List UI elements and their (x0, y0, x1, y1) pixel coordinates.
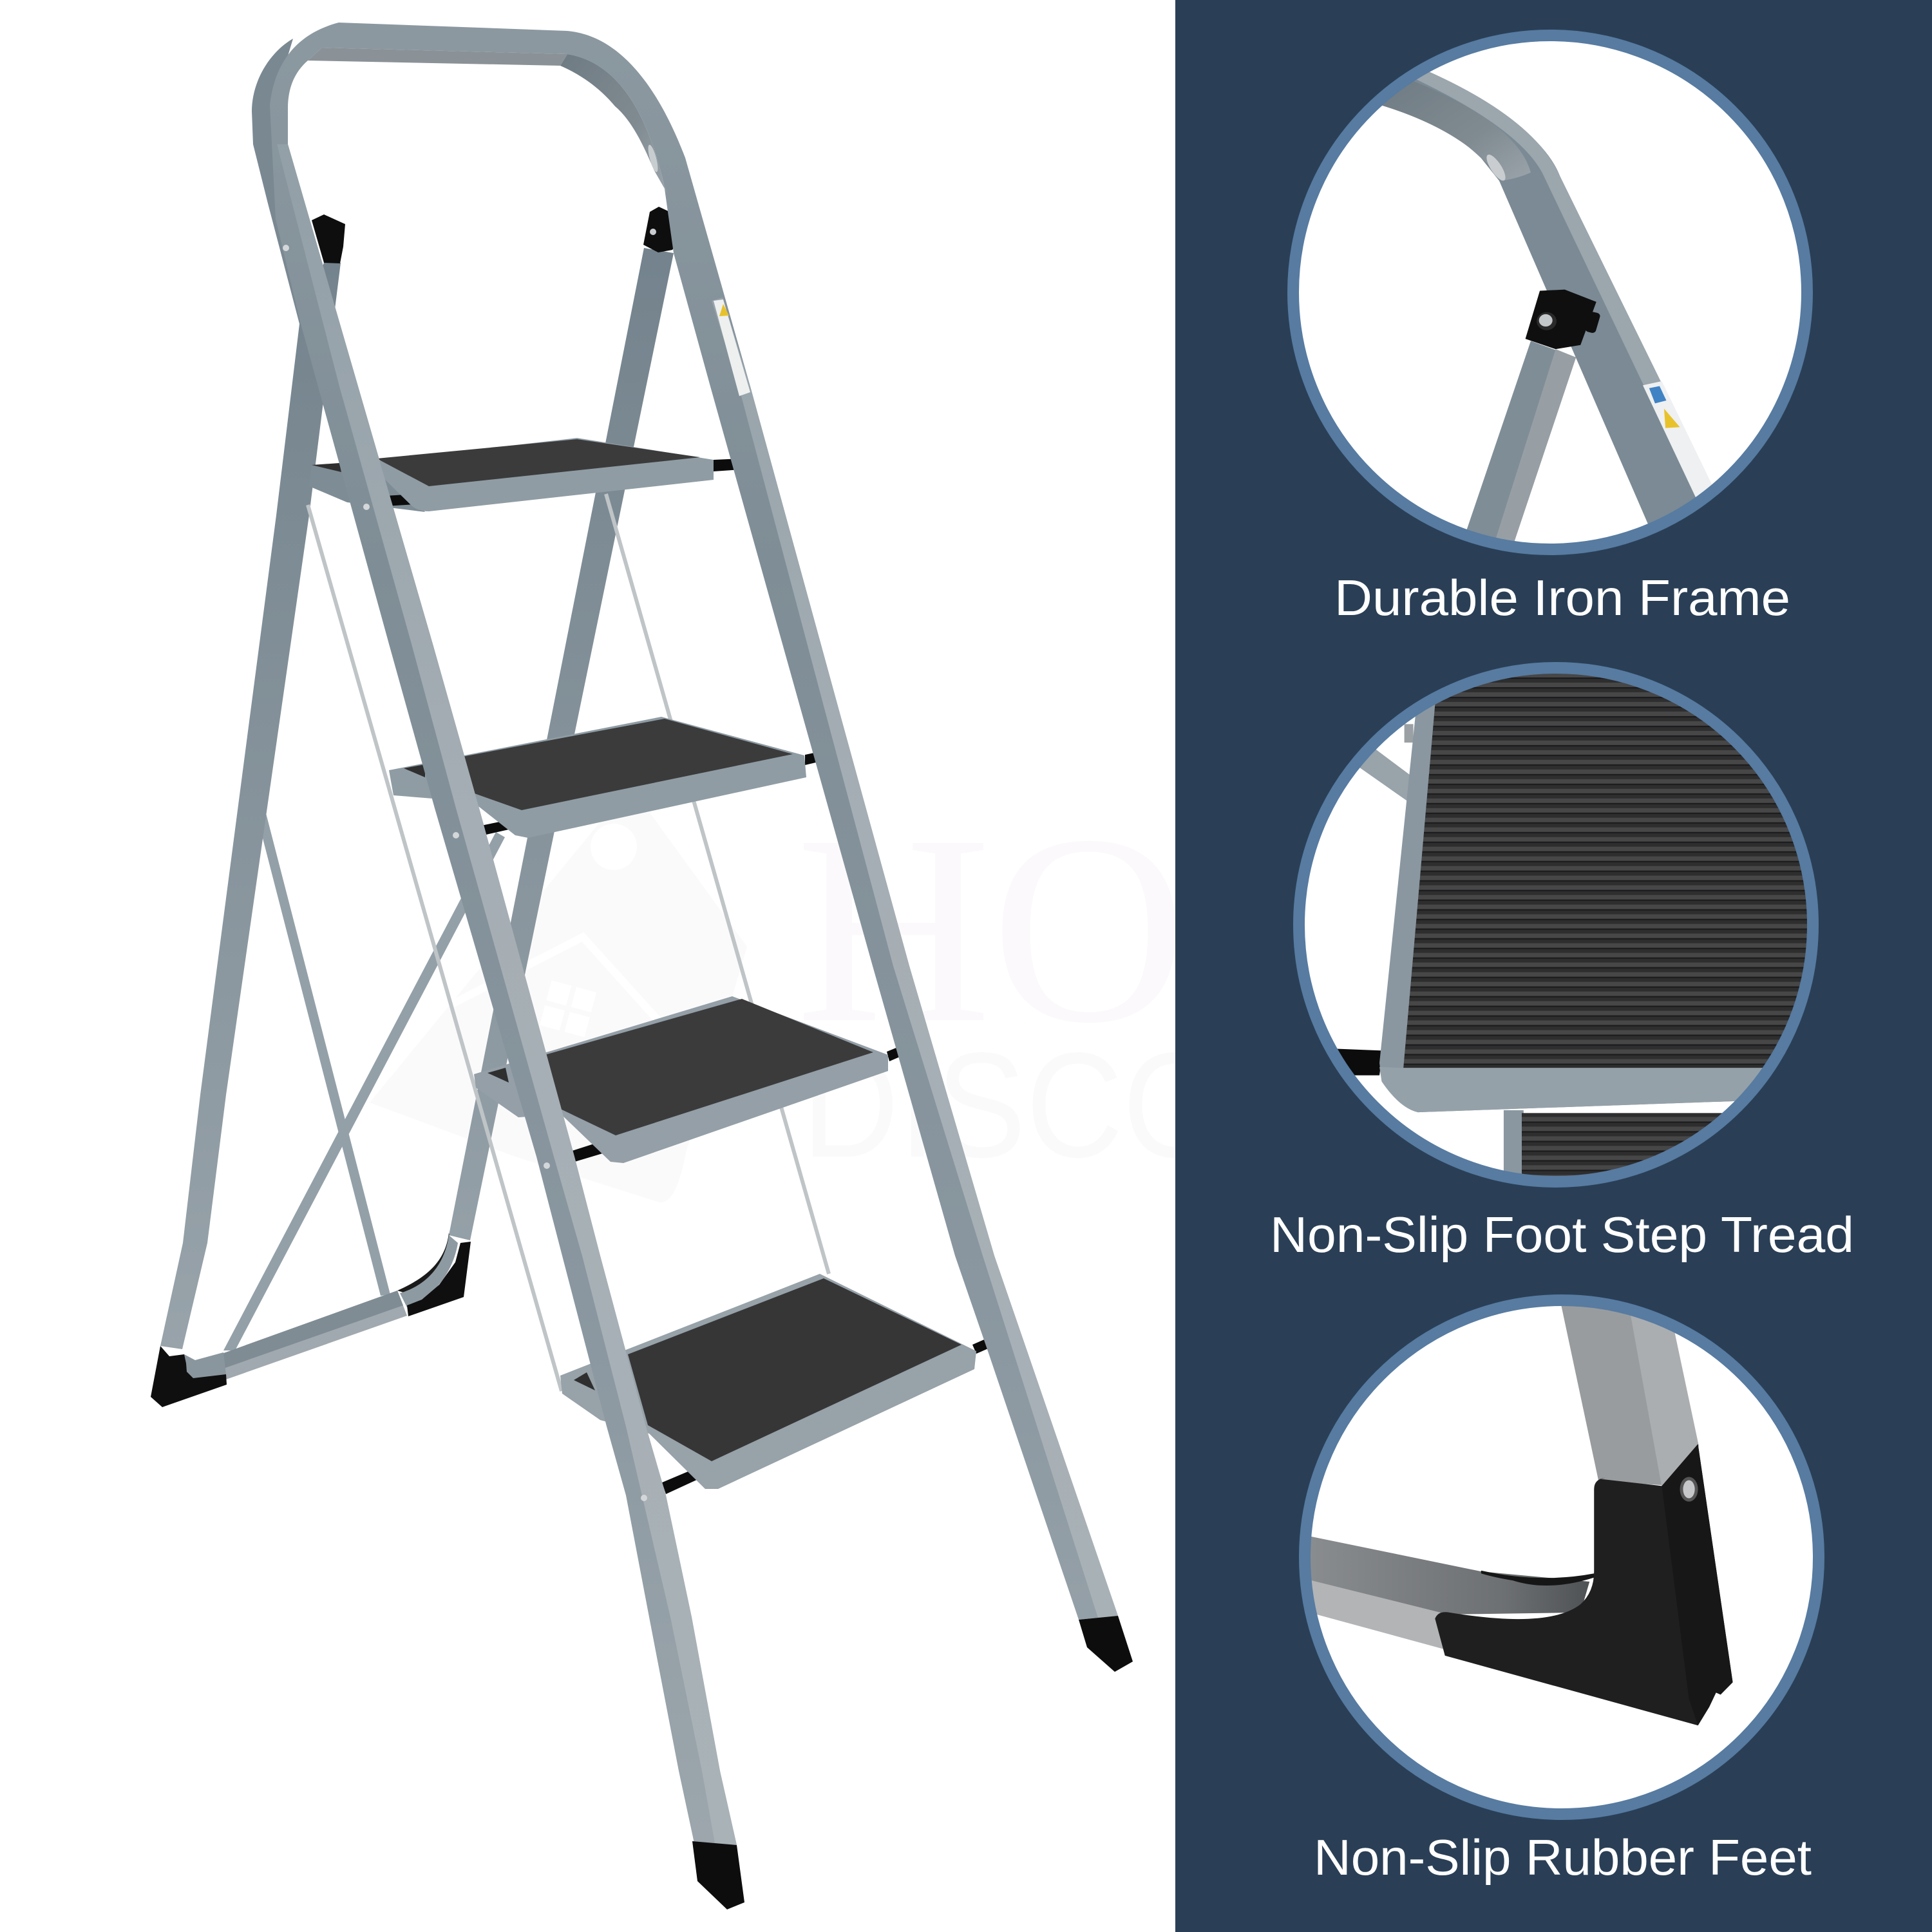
foot closeup (1305, 1300, 1733, 1725)
rear frame left leg (160, 263, 341, 1349)
watermark: faint logo and wordmark: DISCOUNT (802, 1021, 1504, 1188)
caption: non-slip foot step tread: Non-Slip Foot Step Tread (1270, 1206, 1854, 1263)
step 3 (474, 996, 914, 1163)
rear right foot cap (407, 1242, 471, 1316)
rear frame cross braces (223, 811, 505, 1350)
watermark: faint logo and wordmark (370, 779, 1593, 1202)
feature circle: rubber feet (1304, 1300, 1819, 1815)
rear left foot cap (151, 1346, 227, 1407)
rivets (283, 245, 647, 1501)
front frame with top handle (270, 23, 1118, 1845)
front left foot (692, 1841, 744, 1909)
front right foot (1079, 1616, 1133, 1672)
step 2 (389, 717, 835, 838)
watermark: faint logo and wordmark: HOME (796, 779, 1593, 1079)
caption: durable iron frame: Durable Iron Frame (1334, 569, 1790, 626)
rear right tube bend (397, 1233, 458, 1307)
caption: non-slip rubber feet: Non-Slip Rubber Feet (1314, 1829, 1812, 1886)
rear left tube bend (184, 1352, 226, 1379)
rear top right cap with bolt (643, 207, 685, 252)
frame closeup (1378, 70, 1730, 546)
rear top left cap (312, 214, 345, 263)
ring (1293, 35, 1807, 549)
panel: features sidebar (1175, 0, 1932, 1932)
rear frame right leg (449, 248, 674, 1240)
rear arc of handle (252, 39, 322, 324)
warning label on rail (714, 299, 750, 396)
ladder (151, 23, 1133, 1909)
feature circle: durable iron frame (1293, 35, 1808, 550)
safety wires (308, 494, 829, 1391)
step 4 (560, 1274, 1001, 1494)
ring (1299, 668, 1813, 1182)
feature circle: non-slip tread (1298, 667, 1829, 1182)
step 1 (309, 438, 742, 512)
rear frame bottom tube (195, 1291, 407, 1379)
ring (1305, 1300, 1819, 1814)
tread closeup (1332, 668, 1829, 1181)
